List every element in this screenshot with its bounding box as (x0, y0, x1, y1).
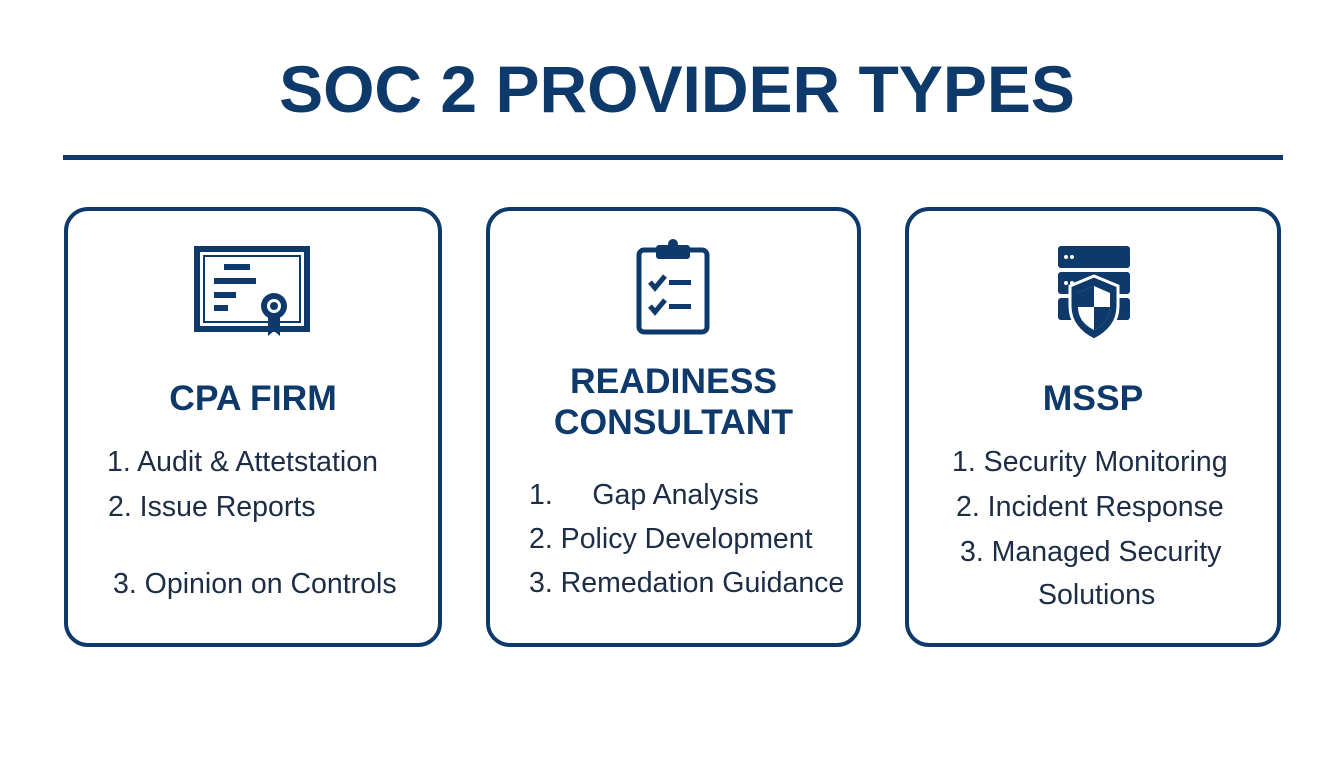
list: CPA firm: 3. Opinion on Controls (113, 568, 397, 600)
panel: readiness consultant (486, 207, 861, 647)
list: readiness consultant: 2. Policy Development (529, 523, 813, 555)
list: MSSP: Solutions (1038, 579, 1155, 611)
list: MSSP: 1. Security Monitoring (952, 446, 1228, 478)
heading: CPA firm: CPA FIRM (169, 378, 337, 418)
heading: readiness consultant: READINESS (570, 361, 777, 401)
list: CPA firm: 2. Issue Reports (108, 491, 316, 523)
panel: CPA firm (64, 207, 442, 647)
list: CPA firm (107, 446, 397, 600)
heading: readiness consultant: CONSULTANT (554, 402, 793, 442)
list: MSSP: 2. Incident Response (956, 491, 1224, 523)
icon: server shield (1058, 246, 1130, 338)
icon: clipboard (636, 239, 710, 334)
title: SOC 2 PROVIDER TYPES (279, 52, 1075, 126)
list: MSSP (952, 446, 1228, 611)
list: MSSP: 3. Managed Security (960, 536, 1221, 568)
heading: MSSP: MSSP (1043, 378, 1143, 418)
heading: readiness consultant (554, 361, 793, 442)
icon: certificate (194, 246, 310, 336)
list: readiness consultant: 1. Gap Analysis (529, 479, 759, 511)
list: readiness consultant: 3. Remedation Guidance (529, 567, 844, 599)
list: CPA firm: 1. Audit & Attetstation (107, 446, 378, 478)
list: readiness consultant (529, 479, 844, 599)
panel: MSSP (905, 207, 1281, 647)
